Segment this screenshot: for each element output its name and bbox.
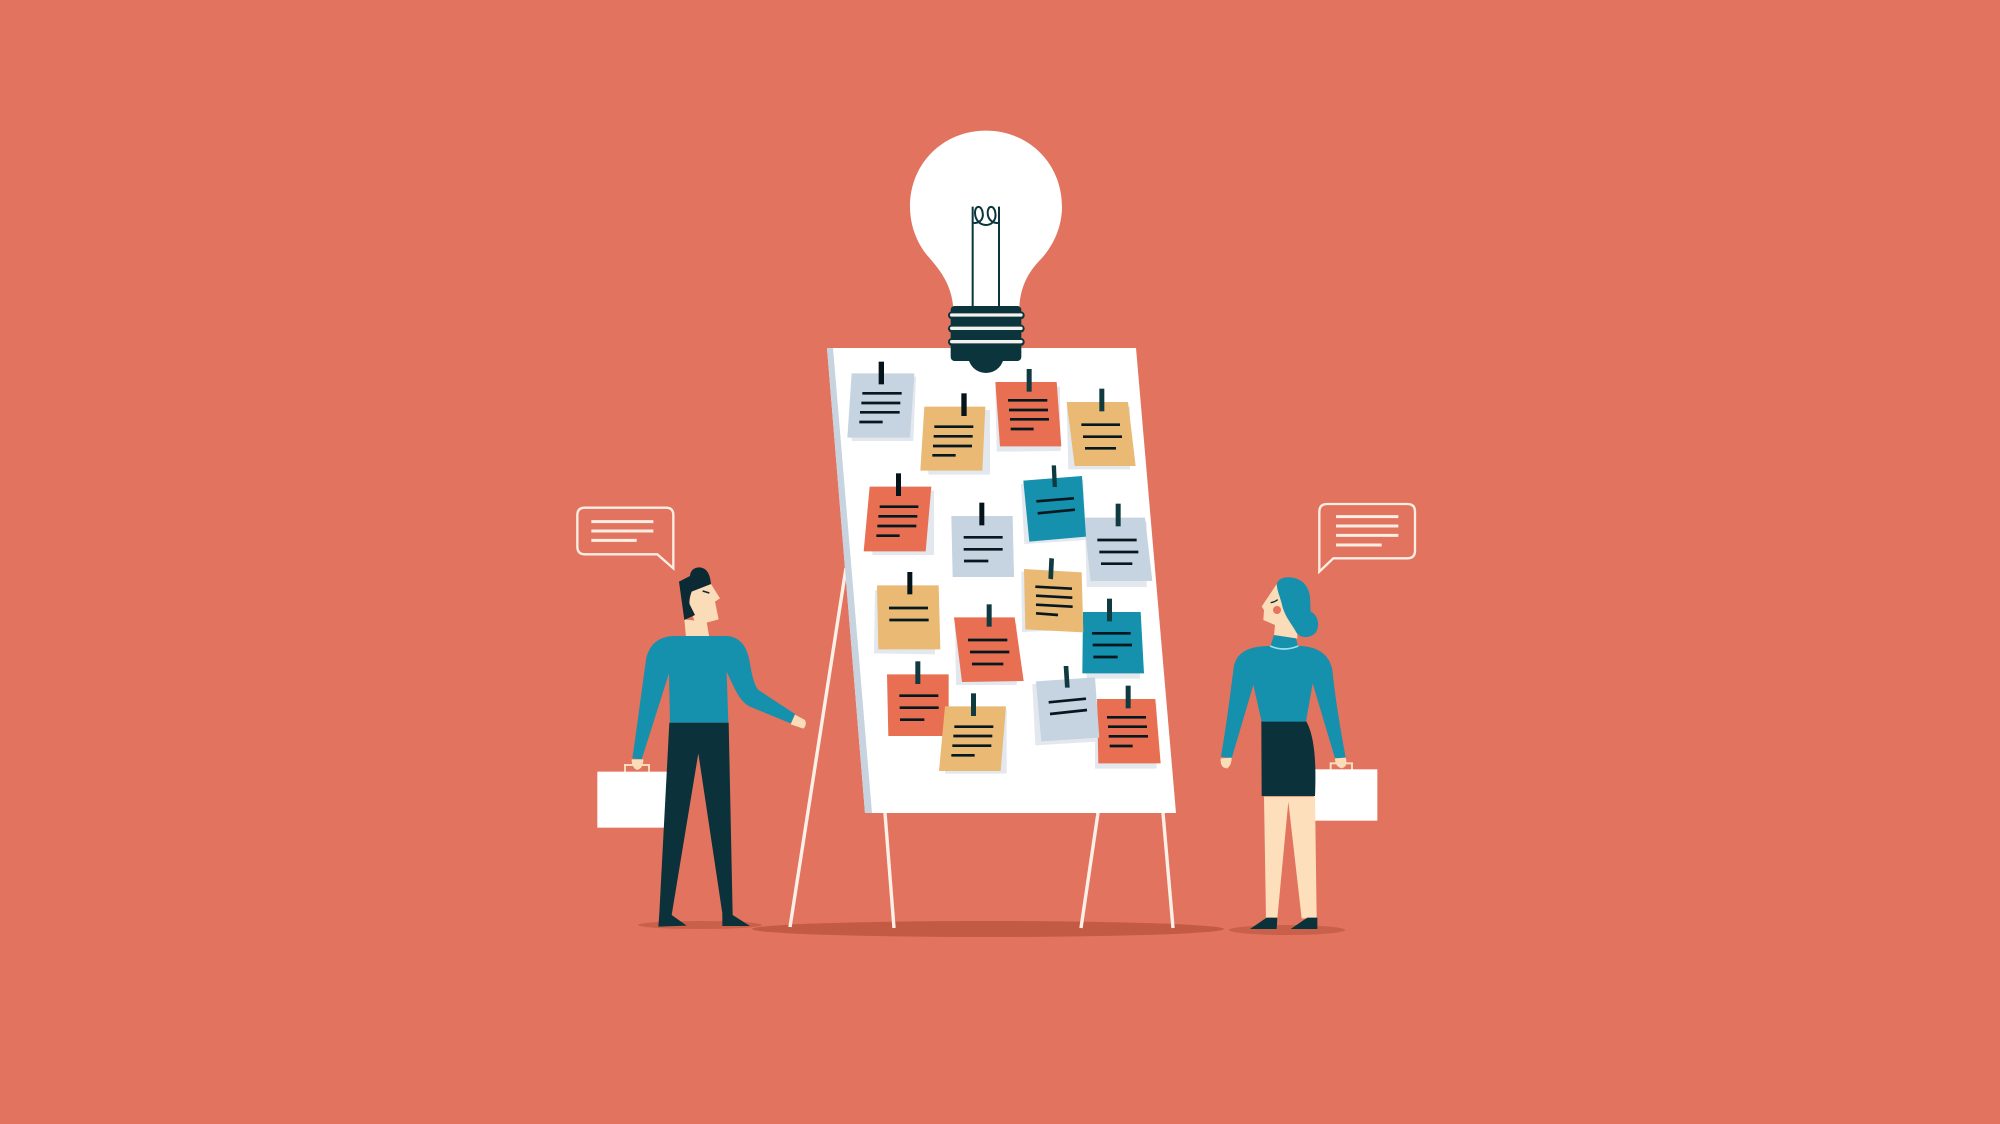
flip board bbox=[827, 348, 1176, 813]
note: grey 1 bbox=[847, 362, 916, 441]
hands: woman bbox=[1221, 758, 1346, 768]
note: red 11 bbox=[954, 604, 1024, 685]
note: red 14 bbox=[887, 661, 949, 736]
legs: woman bbox=[1264, 797, 1317, 918]
icon: light bulb bbox=[910, 131, 1062, 373]
sticky notes: upper group bbox=[847, 362, 1152, 587]
note: amber 2 bbox=[920, 393, 990, 475]
note: grey 13 bbox=[1032, 666, 1099, 745]
note: amber 15 bbox=[939, 693, 1007, 774]
ground shadow: woman bbox=[1229, 925, 1345, 935]
trousers: man bbox=[658, 723, 750, 927]
screw base bbox=[948, 306, 1025, 373]
sweater: man bbox=[632, 636, 795, 759]
ground shadow: man bbox=[638, 921, 762, 929]
hands: man bbox=[632, 715, 806, 770]
sweater: woman bbox=[1221, 635, 1346, 758]
note: grey 6 bbox=[951, 503, 1014, 577]
ground shadow: easel bbox=[752, 921, 1224, 937]
note: red 3 bbox=[995, 369, 1061, 452]
easel legs bbox=[790, 568, 1173, 928]
note: amber 4 bbox=[1067, 389, 1136, 469]
figure: man bbox=[577, 508, 806, 927]
note: red 16 bbox=[1095, 686, 1161, 769]
note: teal 12 bbox=[1082, 599, 1144, 679]
briefcase: woman bbox=[1314, 763, 1377, 821]
sticky notes: lower group bbox=[874, 558, 1161, 774]
head: woman bbox=[1262, 577, 1318, 639]
figure: woman bbox=[1221, 504, 1415, 929]
bulb glass bbox=[910, 131, 1062, 308]
note: amber 10 bbox=[1021, 558, 1083, 632]
briefcase: man bbox=[597, 765, 667, 828]
note: teal 7 bbox=[1021, 465, 1086, 544]
speech bubble: woman bbox=[1319, 504, 1415, 572]
filament bbox=[973, 207, 999, 308]
note: red 5 bbox=[864, 473, 934, 555]
skirt: woman bbox=[1261, 721, 1315, 796]
head: man bbox=[679, 567, 720, 637]
note: grey 8 bbox=[1084, 504, 1152, 587]
note: amber 9 bbox=[874, 572, 940, 654]
shoes: woman bbox=[1250, 918, 1317, 929]
speech bubble: man bbox=[577, 508, 673, 568]
